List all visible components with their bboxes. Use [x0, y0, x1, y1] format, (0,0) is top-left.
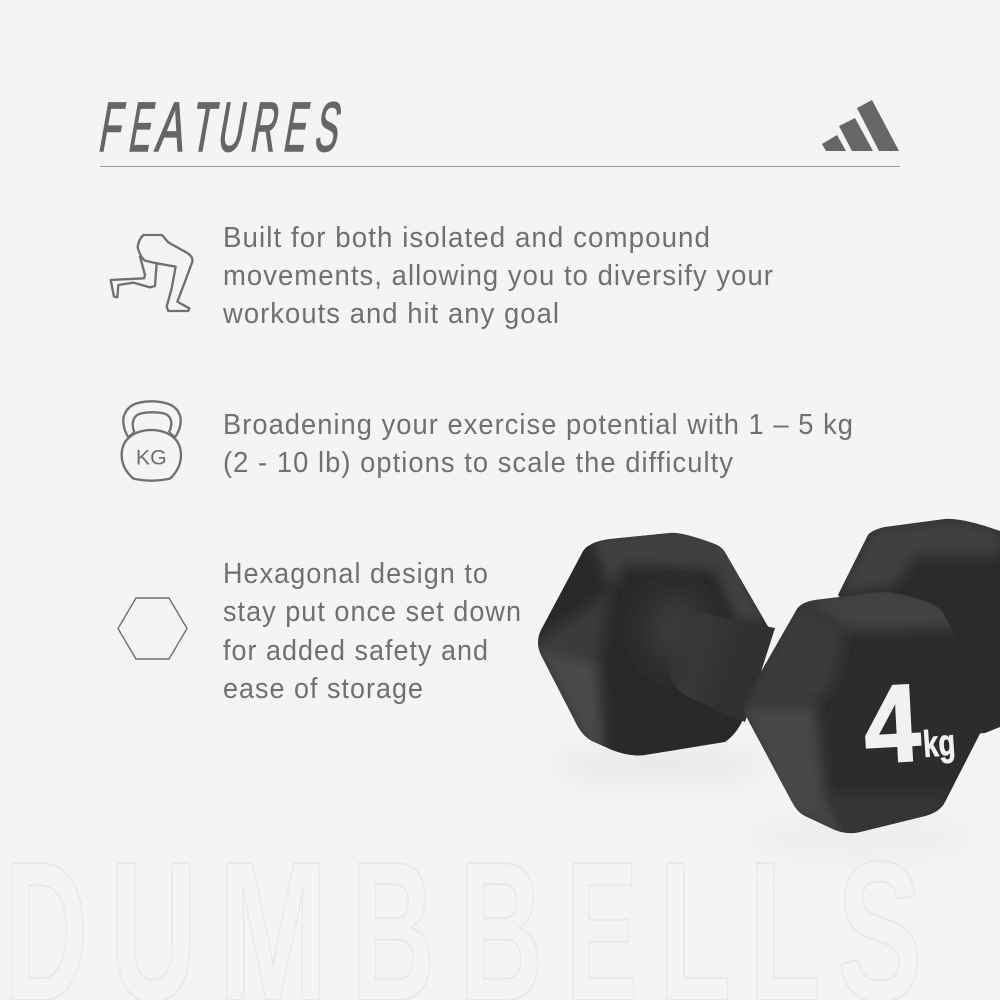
feature 1 text: movements, allowing you to diversify your — [223, 260, 774, 292]
title: R — [246, 87, 285, 166]
title: A — [151, 87, 193, 166]
left hexagon head — [538, 532, 768, 756]
feature 2 icon: kettlebell: KG — [136, 446, 167, 470]
watermark: DUMBBELLS outline word — [4, 821, 922, 1000]
feature 3 text: stay put once set down — [223, 596, 522, 628]
header rule — [100, 166, 900, 167]
title: F — [94, 87, 130, 166]
feature 1 text: Built for both isolated and compound — [223, 222, 711, 254]
title: E — [124, 87, 160, 166]
feature 1 text: workouts and hit any goal — [222, 298, 560, 330]
title — [94, 87, 347, 166]
feature 3 text: for added safety and — [223, 635, 489, 667]
dumbbell photo illustration — [530, 515, 1000, 846]
feature 2 text: (2 - 10 lb) options to scale the difficulty — [223, 447, 734, 479]
feature 2 text: Broadening your exercise potential with 1 – 5 kg — [223, 409, 854, 441]
rear dumbbell — [830, 515, 1000, 740]
weight label: kg — [922, 722, 956, 765]
title: S — [310, 87, 347, 166]
feature 2 icon: kettlebell — [122, 401, 181, 481]
title: T — [186, 87, 223, 166]
weight label: 4 — [861, 661, 923, 787]
handle — [668, 612, 775, 722]
feature 1 text — [222, 222, 774, 330]
title: E — [279, 87, 315, 166]
feature 3 text: ease of storage — [223, 673, 424, 705]
front hexagon head — [744, 592, 980, 834]
feature 3 icon: hexagon — [118, 598, 187, 659]
feature 3 text — [223, 558, 522, 705]
logo: three bars — [822, 100, 899, 151]
feature 3 text: Hexagonal design to — [223, 558, 489, 590]
floor shadows — [550, 753, 980, 846]
feature 2 text — [223, 409, 854, 479]
feature 1 icon: lunge legs — [111, 235, 192, 311]
title: U — [213, 87, 252, 166]
